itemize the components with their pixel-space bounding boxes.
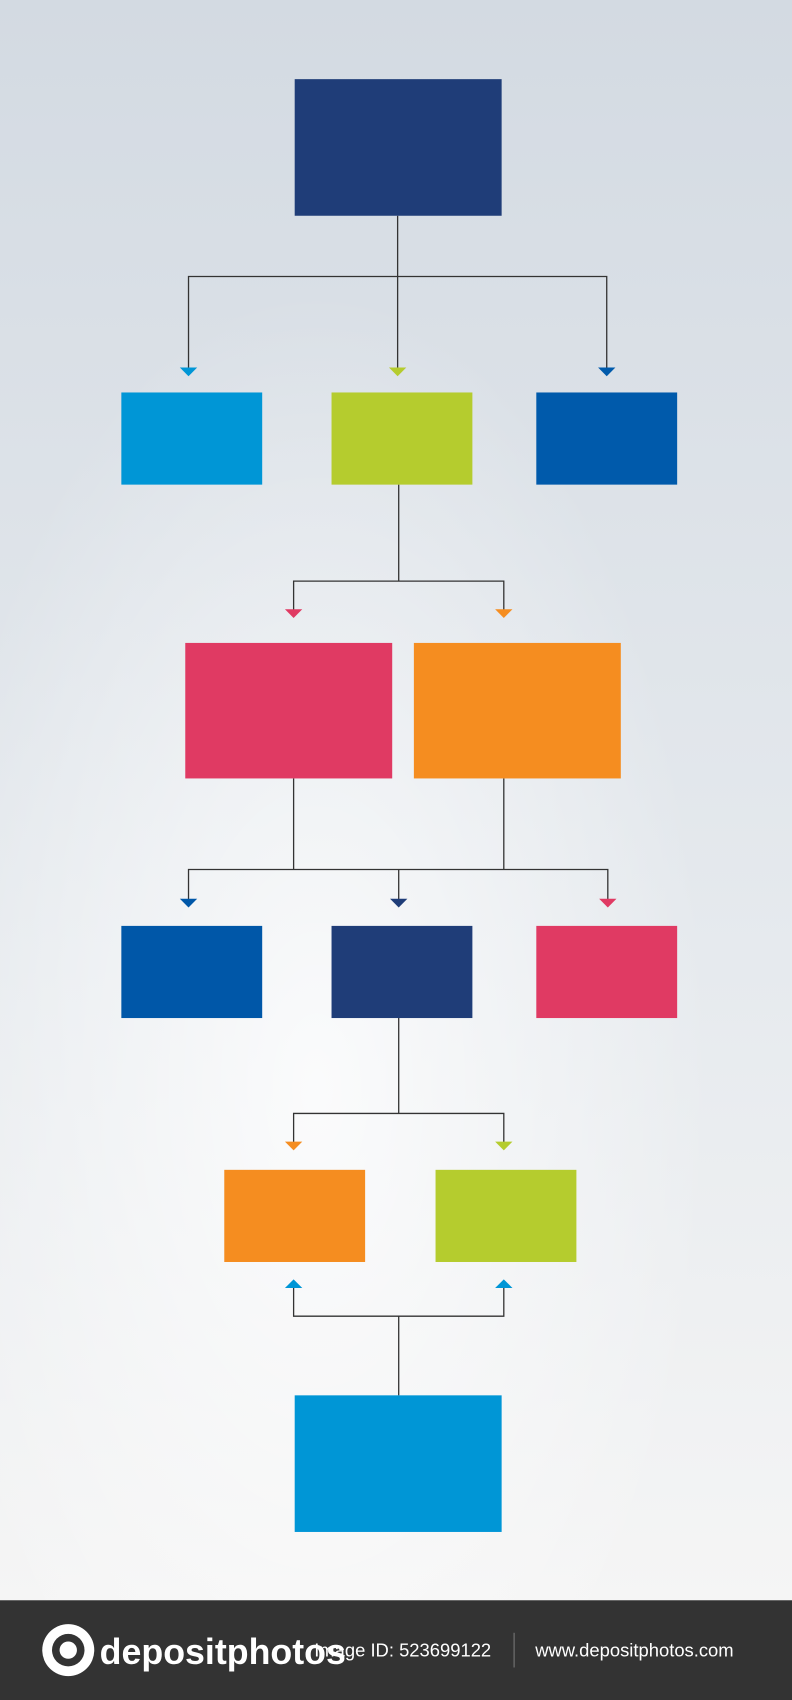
- connectors level 1: [189, 216, 608, 1395]
- footer bar: www.depositphotos.com: [534, 1640, 734, 1661]
- footer bar: depositphotos: [100, 1632, 346, 1672]
- row 5 boxes: [224, 1170, 576, 1262]
- footer bar: [0, 1600, 792, 1700]
- row 3 boxes: [185, 643, 621, 778]
- box: top: [295, 79, 502, 216]
- box: bottom: [295, 1395, 502, 1532]
- arrows: [180, 368, 616, 1288]
- footer bar: Image ID: 523699122: [314, 1640, 491, 1661]
- row 2 boxes: [121, 392, 677, 485]
- row 4 boxes: [121, 926, 677, 1018]
